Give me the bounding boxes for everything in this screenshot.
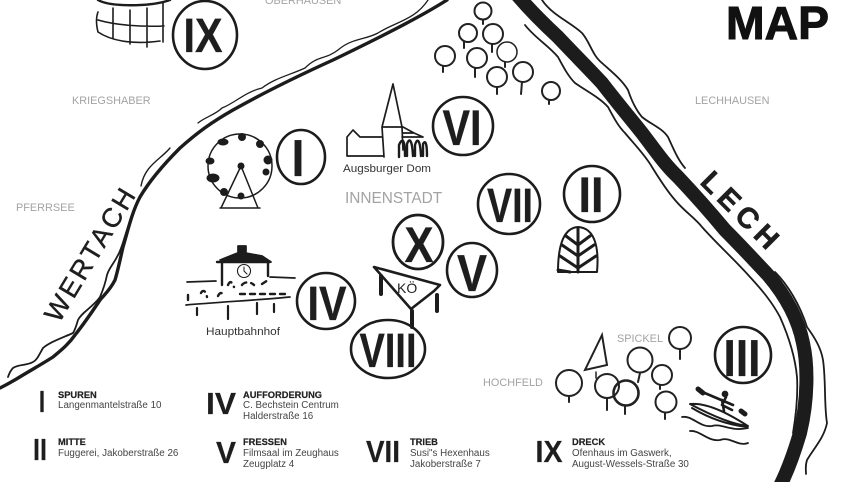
marker I [277, 130, 325, 188]
legend V: Fressen: Zeugplatz 4 [243, 459, 295, 470]
river label: WERTACH: WERTACH [38, 183, 141, 327]
marker VII: VII [487, 180, 533, 233]
legend II: Mitte: Fuggerei, Jakoberstraße 26 [58, 448, 179, 459]
marker VIII: VIII [360, 325, 416, 378]
marker X [393, 215, 443, 273]
legend VII: Trieb: Jakoberstraße 7 [410, 459, 481, 470]
legend I: Spuren: Langenmantelstraße 10 [58, 400, 162, 411]
icon: Augsburger Dom [347, 84, 427, 157]
marker III: III [724, 330, 760, 388]
legend II: Mitte [33, 432, 179, 467]
marker II: II [578, 167, 604, 223]
legend II: Mitte: MITTE [58, 437, 86, 447]
river label: LECH: LECH [694, 165, 785, 256]
label: Augsburger Dom: Augsburger Dom [343, 163, 431, 175]
legend V: Fressen [216, 435, 339, 470]
marker V: V [457, 245, 487, 303]
marker X: X [404, 217, 434, 273]
legend V: Fressen: V [216, 435, 236, 470]
legend II: Mitte: II [33, 432, 47, 467]
icon: ferris wheel [206, 134, 272, 208]
legend I: Spuren [39, 384, 162, 419]
forest north [435, 2, 560, 104]
marker IX: IX [184, 10, 222, 63]
legend VII: Trieb: TRIEB [410, 437, 438, 447]
legend IV: Aufforderung: AUFFORDERUNG [243, 390, 322, 400]
legend IX: Dreck: August-Wessels-Straße 30 [572, 459, 689, 470]
legend IX: Dreck: Ofenhaus im Gaswerk, [572, 448, 672, 459]
legend IX: Dreck: DRECK [572, 437, 605, 447]
marker IX [173, 1, 237, 69]
marker V [447, 243, 497, 303]
legend V: Fressen: FRESSEN [243, 437, 287, 447]
marker II [564, 166, 620, 223]
legend IX: Dreck: IX [536, 434, 563, 469]
legend V: Fressen: Filmsaal im Zeughaus [243, 448, 339, 459]
district labels: HOCHFELD [483, 377, 543, 389]
district labels: KRIEGSHABER [72, 95, 151, 107]
forest south [556, 327, 691, 419]
legend VII: Trieb: Susi"s Hexenhaus [410, 448, 490, 459]
legend I: Spuren: I [39, 384, 45, 419]
marker VI: VI [442, 100, 482, 156]
marker IV: IV [308, 278, 346, 331]
marker VII [478, 174, 540, 234]
icon: kayak [682, 389, 748, 444]
legend IV: Aufforderung: C. Bechstein Centrum [243, 400, 339, 411]
legend IV: Aufforderung: IV [206, 386, 236, 421]
icon: Königsplatz: KÖ [397, 279, 417, 296]
district labels: INNENSTADT [345, 190, 443, 207]
district labels: SPICKEL [617, 333, 663, 345]
marker I: I [292, 130, 304, 188]
river: Wertach [0, 0, 447, 388]
label: Hauptbahnhof: Hauptbahnhof [206, 326, 281, 338]
icon: gas holder [96, 0, 170, 47]
river: Lech [518, 0, 827, 482]
icon: Hauptbahnhof [186, 246, 295, 319]
legend IX: Dreck [536, 434, 689, 470]
district labels: LECHHAUSEN [695, 95, 769, 107]
legend I: Spuren: SPUREN [58, 390, 97, 400]
icon: Königsplatz [374, 267, 440, 327]
district labels [16, 0, 769, 389]
district labels: PFERRSEE [16, 202, 75, 214]
legend IV: Aufforderung: Halderstraße 16 [243, 411, 314, 422]
legend VII: Trieb [366, 434, 490, 470]
icon: Fuggerei house [558, 227, 598, 272]
legend VII: Trieb: VII [366, 434, 400, 469]
legend IV: Aufforderung [206, 386, 339, 422]
